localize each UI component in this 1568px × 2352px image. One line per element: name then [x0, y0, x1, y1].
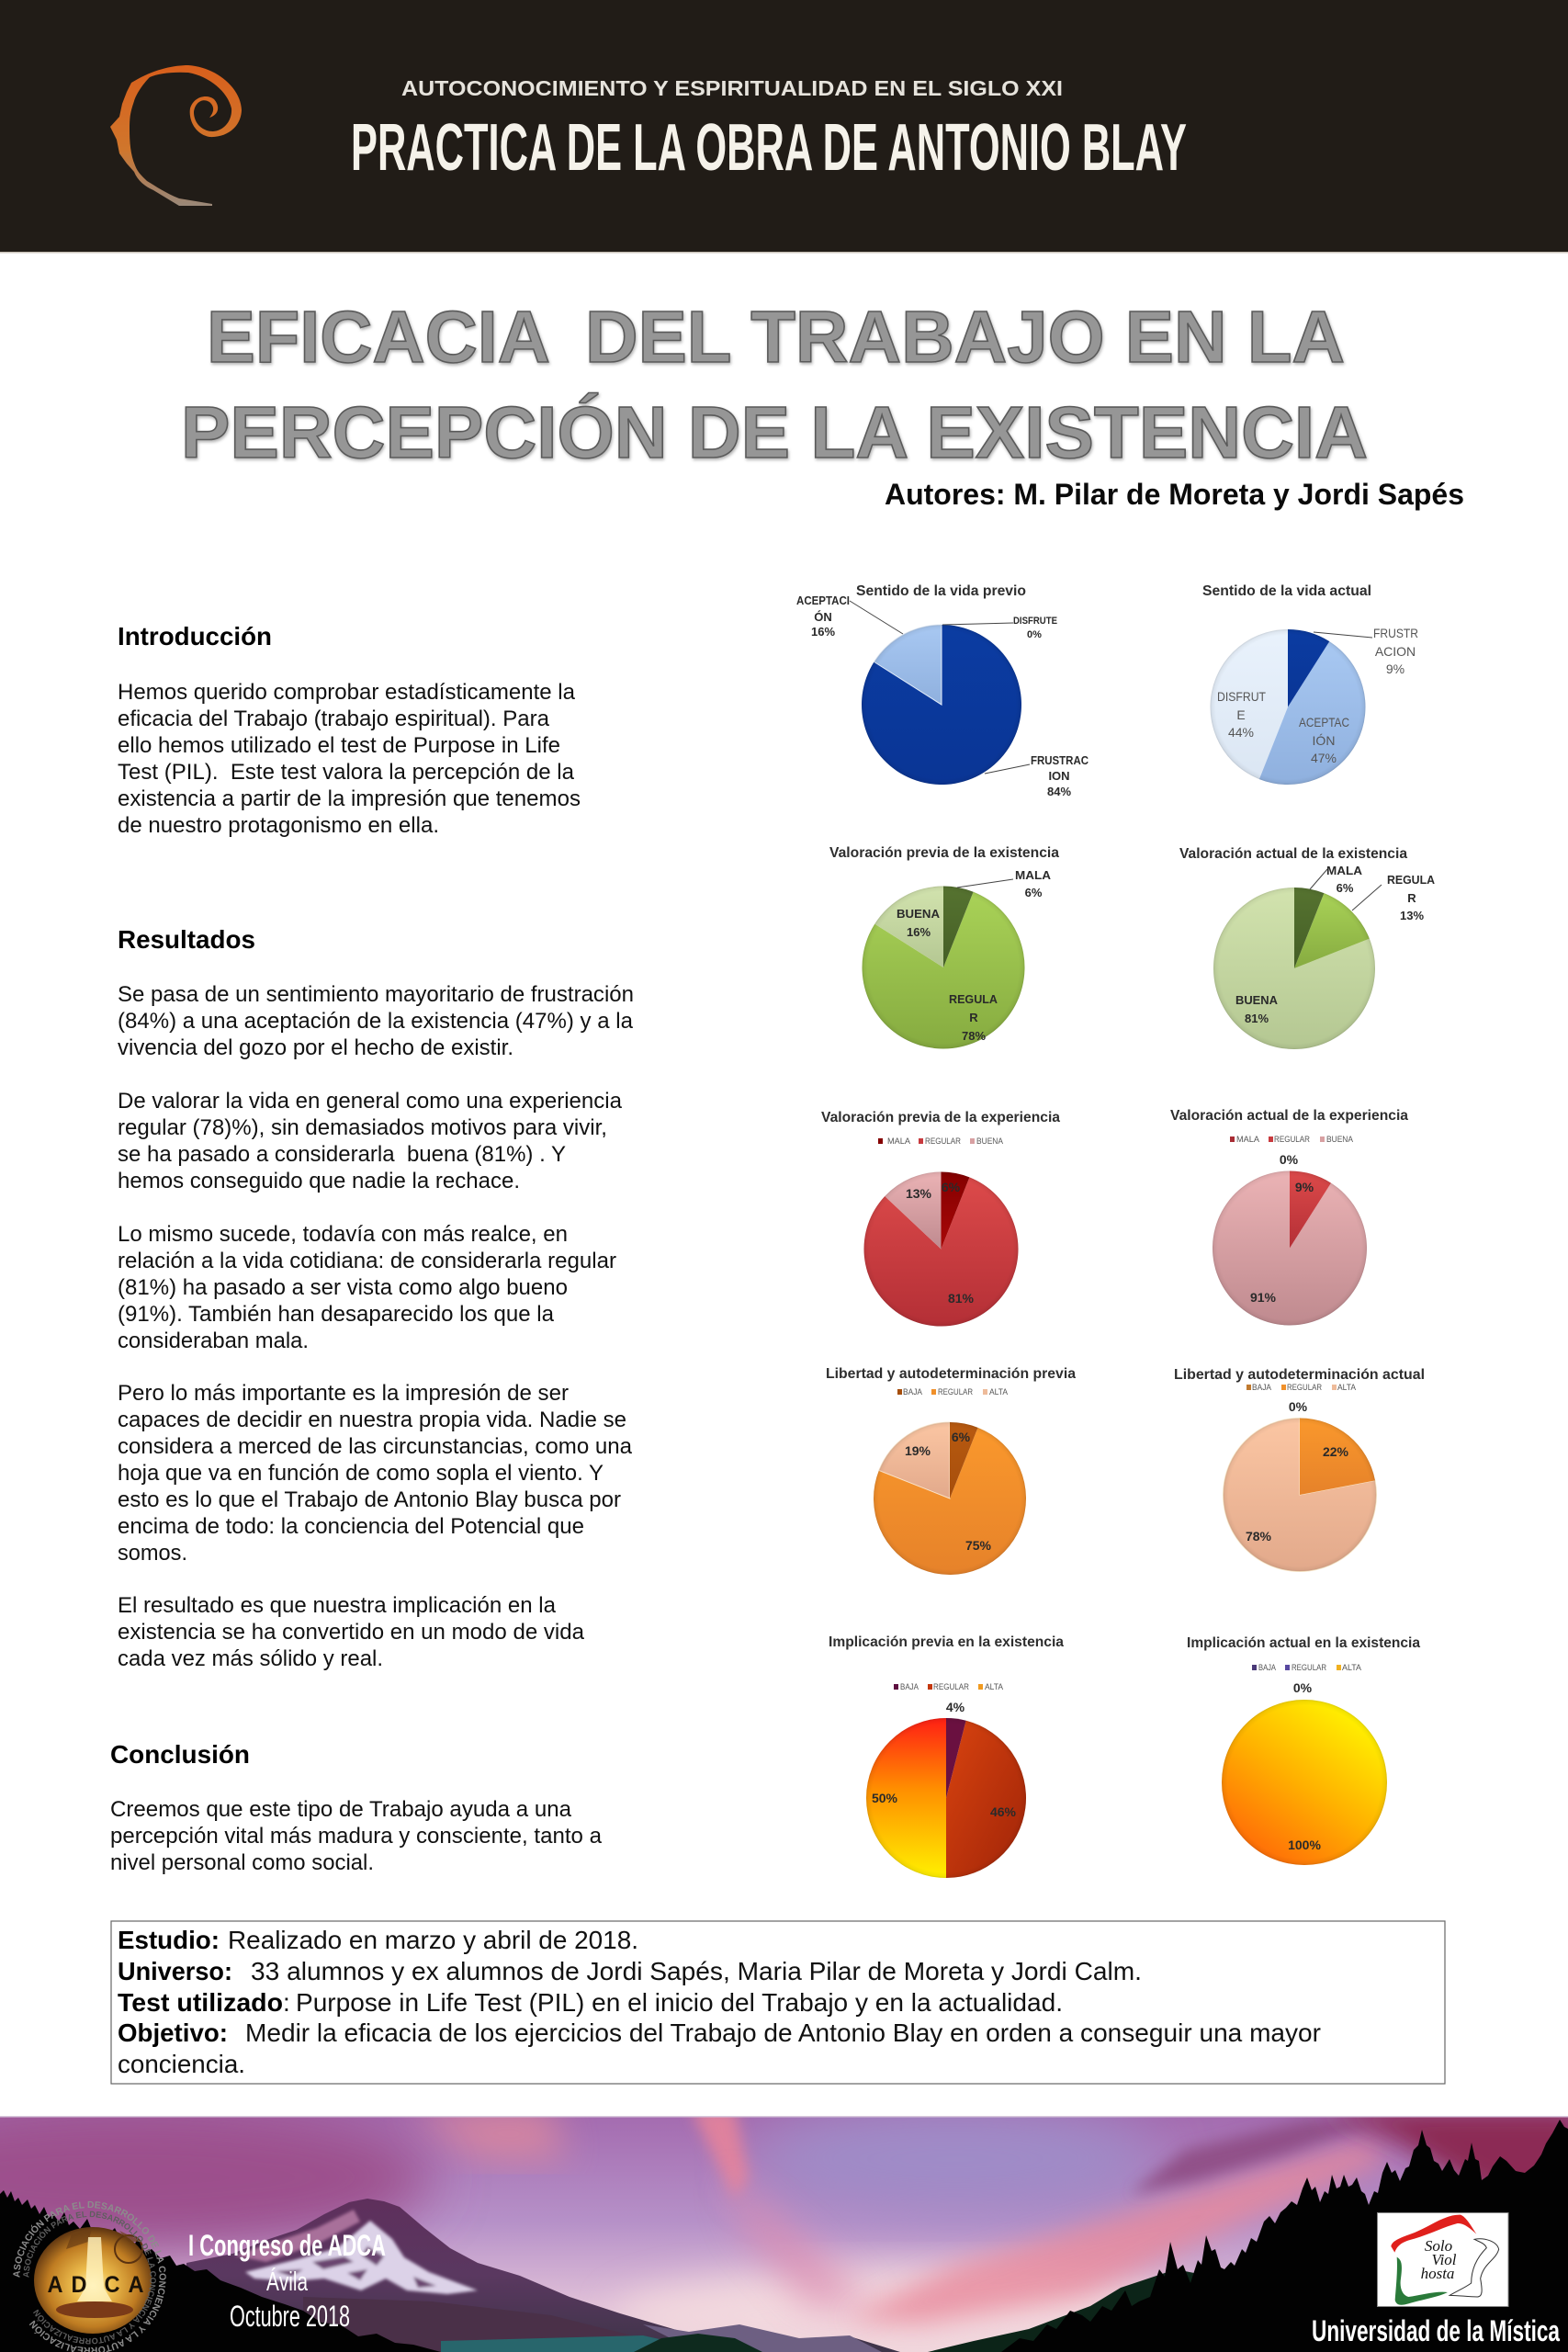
text block: resultados párrafo 1 [118, 982, 634, 1060]
legend: BUENA [1326, 1135, 1353, 1144]
chart: valoración actual de la experiencia: 91% [1250, 1290, 1277, 1305]
chart: valoración previa de la experiencia [821, 1110, 1060, 1327]
text block: resultados párrafo 1: vivencia del gozo por el hecho de existir. [118, 1035, 513, 1060]
text block: introducción: eficacia del Trabajo (trabajo espiritual). Para [118, 707, 550, 731]
chart: valoración previa de la existencia [829, 845, 1059, 1049]
chart: sentido de la vida previo: FRUSTRAC [1031, 753, 1089, 767]
main title: PERCEPCIÓN DE LA EXISTENCIA [181, 391, 1368, 473]
chart: sentido de la vida previo: 84% [1047, 785, 1071, 798]
main title: DEL TRABAJO EN LA [585, 296, 1345, 378]
text block: resultados párrafo 5: El resultado es que nuestra implicación en la [118, 1593, 557, 1618]
legend: BUENA [976, 1136, 1003, 1146]
chart: valoración previa de la existencia: 6% [1025, 886, 1043, 899]
logo: Universidad de la Mística: Solo [1425, 2237, 1452, 2255]
logo: Universidad de la Mística: hosta [1421, 2265, 1454, 2282]
chart: implicación previa en la existencia: 46% [990, 1804, 1017, 1819]
chart: valoración actual de la experiencia: 0% [1280, 1152, 1299, 1167]
universo: 33 alumnos y ex alumnos de Jordi Sapés, Maria Pilar de Moreta y Jordi Calm. [251, 1957, 1142, 1985]
legend: ALTA [985, 1682, 1003, 1691]
chart: valoración actual de la existencia: Valoración actual de la existencia [1179, 846, 1407, 862]
text block: introducción: Test (PIL). Este test valora la percepción de la [118, 760, 575, 785]
legend: BAJA [1252, 1383, 1271, 1392]
text block: resultados párrafo 4: encima de todo: la conciencia del Potencial que [118, 1514, 584, 1539]
main title: EFICACIA [207, 296, 550, 378]
chart: sentido de la vida actual: FRUSTR [1373, 626, 1418, 640]
chart: sentido de la vida previo: 0% [1027, 629, 1042, 640]
main title [181, 296, 1368, 473]
chart: valoración actual de la existencia: REGULA [1387, 873, 1436, 887]
logo: Universidad de la Mística: Viol [1431, 2251, 1457, 2268]
legend: REGULAR [933, 1682, 969, 1691]
objetivo: Objetivo: [118, 2018, 228, 2047]
chart: sentido de la vida actual: ACEPTAC [1299, 715, 1349, 729]
heading: introducción: Introducción [118, 622, 272, 650]
chart: sentido de la vida actual: 47% [1311, 751, 1337, 765]
legend: ALTA [989, 1387, 1008, 1396]
legend: MALA [887, 1136, 910, 1146]
text block: resultados párrafo 1: Se pasa de un sentimiento mayoritario de frustración [118, 982, 634, 1007]
chart: valoración actual de la existencia: 13% [1400, 909, 1424, 922]
text block: resultados párrafo 2: regular (78)%), sin demasiados motivos para vivir, [118, 1115, 607, 1140]
legend [1230, 1135, 1353, 1144]
text block: conclusión: percepción vital más madura y consciente, tanto a [110, 1824, 603, 1849]
chart: valoración actual de la experiencia: 9% [1295, 1180, 1314, 1194]
text block: resultados párrafo 1: (84%) a una aceptación de la existencia (47%) y a la [118, 1009, 634, 1034]
emblem: ADCA: C [105, 2272, 119, 2298]
emblem: ADCA: D [72, 2272, 86, 2298]
legend: MALA [1236, 1135, 1259, 1144]
congress text: I Congreso de ADCA [188, 2229, 386, 2262]
trees left [0, 2190, 441, 2352]
header band [0, 0, 1568, 254]
chart: sentido de la vida actual: 44% [1228, 725, 1254, 740]
legend: ALTA [1342, 1663, 1361, 1672]
chart: sentido de la vida previo [796, 583, 1089, 798]
text block: resultados párrafo 4: hoja que va en función de como sopla el viento. Y [118, 1461, 604, 1486]
text block: resultados párrafo 4: esto es lo que el Trabajo de Antonio Blay busca por [118, 1487, 621, 1512]
footer landscape [0, 2117, 1568, 2352]
chart: implicación actual en la existencia [1187, 1635, 1420, 1865]
icon: orange spiral logo [110, 65, 242, 206]
chart: sentido de la vida actual [1202, 583, 1418, 785]
objetivo [118, 2018, 1321, 2078]
legend: BAJA [900, 1682, 919, 1691]
legend: ALTA [1337, 1383, 1356, 1392]
text block: introducción: Hemos querido comprobar estadísticamente la [118, 680, 576, 705]
chart: libertad y autodeterminación previa [826, 1366, 1076, 1575]
text block: resultados párrafo 3: (91%). También han desaparecido los que la [118, 1302, 555, 1327]
text block: resultados párrafo 2: se ha pasado a considerarla buena (81%) . Y [118, 1142, 566, 1167]
chart: libertad y autodeterminación actual: 22% [1323, 1444, 1349, 1459]
test utilizado: : [283, 1988, 290, 2017]
chart: sentido de la vida actual: Sentido de la vida actual [1202, 583, 1371, 599]
text block: resultados párrafo 3: (81%) ha pasado a ser vista como algo bueno [118, 1275, 568, 1300]
emblem: ADCA: A [129, 2272, 143, 2298]
emblem: ADCA: A [48, 2272, 62, 2298]
footer top edge [0, 2116, 1568, 2117]
legend [878, 1136, 1003, 1146]
panel: introducción [118, 622, 581, 838]
legend: BAJA [1258, 1663, 1276, 1672]
chart: libertad y autodeterminación actual: 0% [1289, 1399, 1308, 1414]
chart: sentido de la vida previo: DISFRUTE [1013, 616, 1057, 627]
chart: valoración previa de la experiencia: 6% [942, 1180, 961, 1194]
text block: introducción: de nuestro protagonismo en ella. [118, 813, 439, 838]
heading: resultados: Resultados [118, 925, 255, 954]
text block: resultados párrafo 3: relación a la vida cotidiana: de considerarla regular [118, 1249, 616, 1273]
chart: valoración actual de la existencia: 6% [1337, 881, 1354, 895]
chart: libertad y autodeterminación previa: 19% [905, 1443, 931, 1458]
emblem: ADCA: ASOCIACIÓN PARA EL DESARROLLO DE LA CONCIENCIA Y LA AUTORREALIZACIÓN [23, 2211, 156, 2345]
text block: resultados párrafo 3: consideraban mala. [118, 1329, 309, 1353]
chart: sentido de la vida actual: ACION [1375, 644, 1416, 659]
congress text: Ávila [266, 2267, 309, 2297]
legend: REGULAR [1292, 1663, 1326, 1672]
text block: resultados párrafo 2: De valorar la vida en general como una experiencia [118, 1089, 623, 1114]
panel: conclusión [110, 1740, 603, 1875]
chart: implicación previa en la existencia: 4% [946, 1700, 965, 1714]
chart: sentido de la vida actual: IÓN [1313, 733, 1335, 748]
chart: libertad y autodeterminación actual: 78% [1246, 1529, 1272, 1544]
header subtitle: AUTOCONOCIMIENTO Y ESPIRITUALIDAD EN EL SIGLO XXI [401, 76, 1063, 100]
emblem: ADCA: ASOCIACIÓN PARA EL DESARROLLO DE LA CONCIENCIA Y LA AUTORREALIZACIÓN [13, 2201, 166, 2352]
chart: sentido de la vida previo: Sentido de la vida previo [856, 583, 1026, 599]
text block: resultados párrafo 3: Lo mismo sucede, todavía con más realce, en [118, 1222, 568, 1247]
objetivo: conciencia. [118, 2050, 245, 2078]
chart: valoración actual de la existencia: MALA [1326, 864, 1363, 877]
panel: resultados [118, 925, 634, 1671]
legend [894, 1682, 1003, 1691]
chart: valoración previa de la existencia: 16% [907, 925, 931, 939]
text block: resultados párrafo 5 [118, 1593, 585, 1671]
chart: valoración previa de la experiencia: 81% [948, 1291, 975, 1306]
text block: resultados párrafo 4: capaces de decidir en nuestra propia vida. Nadie se [118, 1408, 626, 1432]
chart: implicación actual en la existencia: Implicación actual en la existencia [1187, 1635, 1420, 1651]
chart: sentido de la vida previo: 16% [811, 625, 835, 639]
chart: implicación previa en la existencia [829, 1634, 1064, 1878]
chart: valoración previa de la experiencia: 13% [906, 1186, 932, 1201]
chart: libertad y autodeterminación previa: 6% [952, 1430, 971, 1444]
text block: conclusión: nivel personal como social. [110, 1850, 374, 1875]
objetivo: Medir la eficacia de los ejercicios del Trabajo de Antonio Blay en orden a conseguir una mayor [245, 2018, 1321, 2047]
chart: libertad y autodeterminación actual: Libertad y autodeterminación actual [1174, 1367, 1425, 1383]
authors: Autores: M. Pilar de Moreta y Jordi Sapés [885, 478, 1464, 511]
legend: REGULAR [1274, 1135, 1310, 1144]
chart: valoración previa de la existencia: REGULA [949, 992, 998, 1006]
legend [1252, 1663, 1361, 1672]
text block: introducción [118, 680, 581, 838]
chart: sentido de la vida previo: ACEPTACI [796, 594, 850, 607]
text block: resultados párrafo 5: cada vez más sólido y real. [118, 1646, 383, 1671]
legend [897, 1387, 1008, 1396]
chart: sentido de la vida actual: E [1236, 707, 1246, 722]
chart: sentido de la vida previo: ION [1048, 769, 1070, 783]
text block: introducción: existencia a partir de la impresión que tenemos [118, 786, 581, 811]
chart: valoración previa de la existencia: 78% [962, 1029, 986, 1043]
text block: resultados párrafo 2: hemos conseguido que nadie la rechace. [118, 1169, 520, 1193]
text block: conclusión: Creemos que este tipo de Trabajo ayuda a una [110, 1797, 572, 1822]
heading: conclusión: Conclusión [110, 1740, 250, 1769]
text block: resultados párrafo 4: somos. [118, 1541, 187, 1566]
chart: libertad y autodeterminación previa: Libertad y autodeterminación previa [826, 1366, 1076, 1382]
chart: libertad y autodeterminación actual [1174, 1367, 1425, 1571]
logo: Universidad de la Mística [1312, 2212, 1560, 2347]
chart: valoración actual de la existencia: R [1407, 891, 1416, 905]
chart: valoración previa de la existencia: R [969, 1011, 978, 1024]
chart: sentido de la vida actual: 9% [1386, 662, 1404, 676]
chart: valoración actual de la experiencia: Valoración actual de la experiencia [1170, 1108, 1408, 1124]
universo: Universo: [118, 1957, 232, 1985]
legend [1247, 1383, 1356, 1392]
chart: valoración actual de la experiencia [1170, 1108, 1408, 1325]
estudio: Realizado en marzo y abril de 2018. [228, 1926, 638, 1954]
text block: resultados párrafo 5: existencia se ha convertido en un modo de vida [118, 1620, 585, 1645]
legend: REGULAR [925, 1136, 961, 1146]
chart: sentido de la vida actual: DISFRUT [1217, 689, 1266, 704]
text block: introducción: ello hemos utilizado el test de Purpose in Life [118, 733, 560, 758]
chart: sentido de la vida previo: ÓN [814, 610, 832, 624]
chart: valoración previa de la experiencia: Valoración previa de la experiencia [821, 1110, 1060, 1125]
text block: resultados párrafo 4 [118, 1381, 633, 1566]
chart: valoración actual de la existencia: 81% [1245, 1012, 1269, 1025]
text block: resultados párrafo 2 [118, 1089, 623, 1193]
chart: valoración actual de la existencia: BUENA [1235, 993, 1279, 1007]
legend: BAJA [903, 1387, 922, 1396]
legend: REGULAR [938, 1387, 973, 1396]
chart: implicación actual en la existencia: 0% [1293, 1680, 1313, 1695]
text block: conclusión [110, 1797, 603, 1875]
chart: valoración actual de la existencia [1179, 846, 1436, 1049]
trees right [928, 2120, 1568, 2352]
text block: resultados párrafo 3 [118, 1222, 616, 1353]
chart: implicación actual en la existencia: 100% [1288, 1838, 1321, 1852]
text block: resultados párrafo 4: considera a merced de las circunstancias, como una [118, 1434, 633, 1459]
chart: implicación previa en la existencia: Implicación previa en la existencia [829, 1634, 1064, 1650]
text block: resultados párrafo 4: Pero lo más importante es la impresión de ser [118, 1381, 569, 1406]
chart: valoración previa de la existencia: MALA [1015, 868, 1052, 882]
panel: ficha del estudio [111, 1921, 1445, 2084]
congress text: Octubre 2018 [230, 2300, 350, 2333]
chart: valoración previa de la existencia: BUENA [897, 907, 941, 921]
chart: implicación previa en la existencia: 50% [872, 1791, 898, 1805]
congress text [189, 2234, 386, 2326]
chart: valoración previa de la existencia: Valoración previa de la existencia [829, 845, 1059, 861]
legend: REGULAR [1287, 1383, 1322, 1392]
estudio: Estudio: [118, 1926, 220, 1954]
mountain [186, 2199, 900, 2352]
test utilizado: Purpose in Life Test (PIL) en el inicio del Trabajo y en la actualidad. [296, 1988, 1063, 2017]
test utilizado: Test utilizado [118, 1988, 283, 2017]
chart: libertad y autodeterminación previa: 75% [965, 1538, 992, 1553]
